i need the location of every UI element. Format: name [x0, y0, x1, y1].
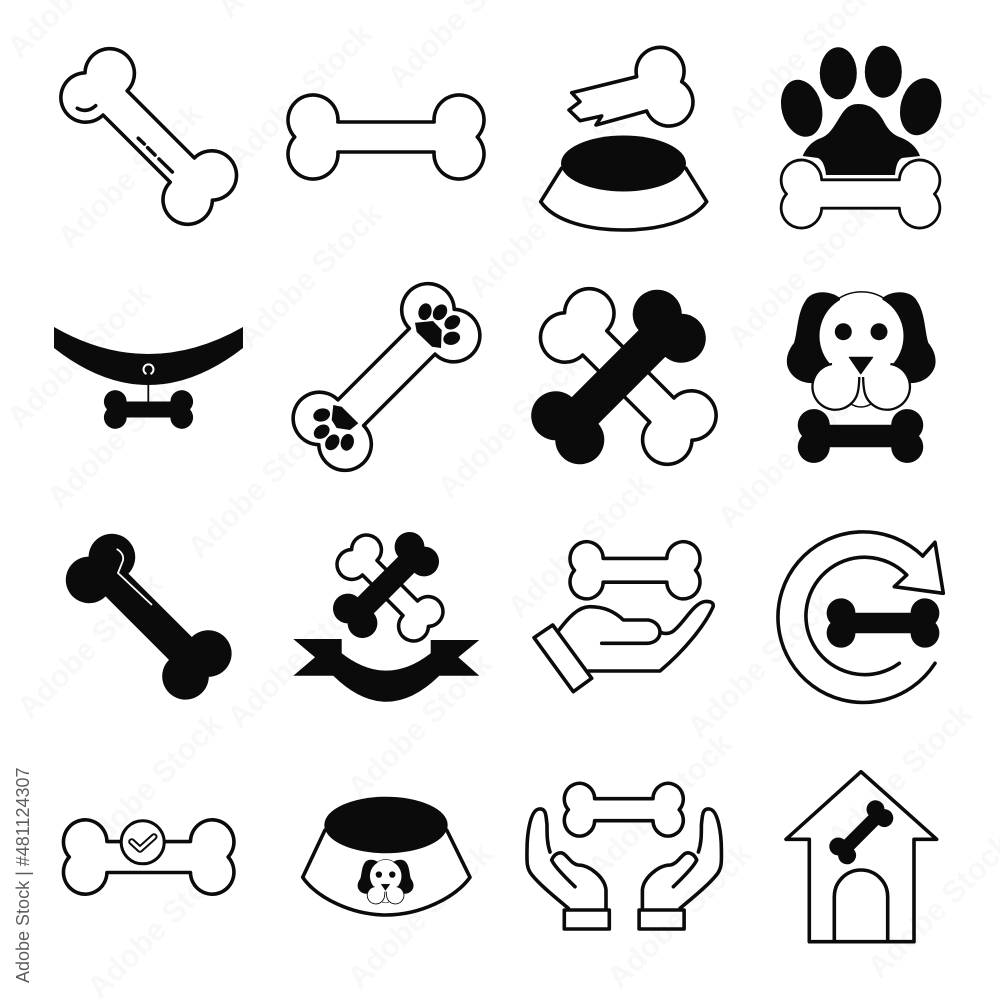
- background watermark: Adobe Stock: [340, 646, 499, 805]
- right hand: [639, 809, 721, 929]
- background watermark: Adobe Stock: [0, 276, 159, 435]
- background watermark: Adobe Stock: [840, 76, 999, 235]
- background watermark: Adobe Stock: [230, 196, 389, 355]
- background watermark: Adobe Stock: [720, 196, 879, 355]
- icon: verified bone with check: [63, 820, 234, 894]
- icon: refresh arrow with bone: [778, 532, 943, 702]
- background watermark: Adobe Stock: [50, 96, 209, 255]
- icon: bone over open hand: [534, 542, 713, 692]
- background watermark: Adobe Stock: [820, 696, 979, 855]
- background watermark: Adobe Stock: [70, 706, 229, 865]
- cuff: [534, 625, 592, 692]
- background watermark: Adobe Stock: [340, 836, 499, 995]
- background watermark: Adobe Stock: [220, 576, 379, 735]
- bottom paw: [311, 405, 358, 453]
- ribbon: [293, 639, 479, 702]
- top paw: [415, 302, 463, 348]
- background watermark: Adobe Stock: [10, 566, 169, 725]
- icon: bone with paw prints: [282, 273, 491, 481]
- icon: dog with bone: [787, 292, 936, 463]
- icon: horizontal bone: [288, 95, 484, 179]
- background watermark: Adobe Stock: [680, 586, 839, 745]
- icon: dog house with bone: [786, 772, 937, 942]
- background watermark: Adobe Stock: [460, 146, 619, 305]
- icon: two hands holding bone: [527, 783, 721, 929]
- background watermark: Adobe Stock: [220, 16, 379, 175]
- icon: crossed bones black and white: [521, 278, 726, 475]
- icon: bowl with dog face: [303, 797, 470, 915]
- background watermark: Adobe Stock: [580, 726, 739, 885]
- background watermark: Adobe Stock: [510, 66, 669, 225]
- background watermark: Adobe Stock: [710, 376, 869, 535]
- icon: plain diagonal bone: [51, 38, 247, 235]
- hand: [558, 601, 713, 671]
- icon: collar with bone tag: [54, 327, 243, 429]
- bowl: [541, 136, 707, 230]
- left hand: [527, 809, 609, 929]
- background watermark: Adobe Stock: [500, 466, 659, 625]
- background watermark: Adobe Stock: [430, 346, 589, 505]
- icon: broken bone over bowl: [541, 47, 707, 230]
- icon: paw print on bone: [775, 46, 948, 228]
- icon: crossed bones over ribbon: [293, 526, 479, 702]
- background watermark: Adobe Stock: [40, 356, 199, 515]
- background watermark: Adobe Stock: [180, 406, 339, 565]
- stock id side label: Adobe Stock | #481124307: [13, 767, 33, 983]
- background watermark: Adobe Stock: [600, 836, 759, 995]
- icon: solid black bone: [56, 524, 241, 709]
